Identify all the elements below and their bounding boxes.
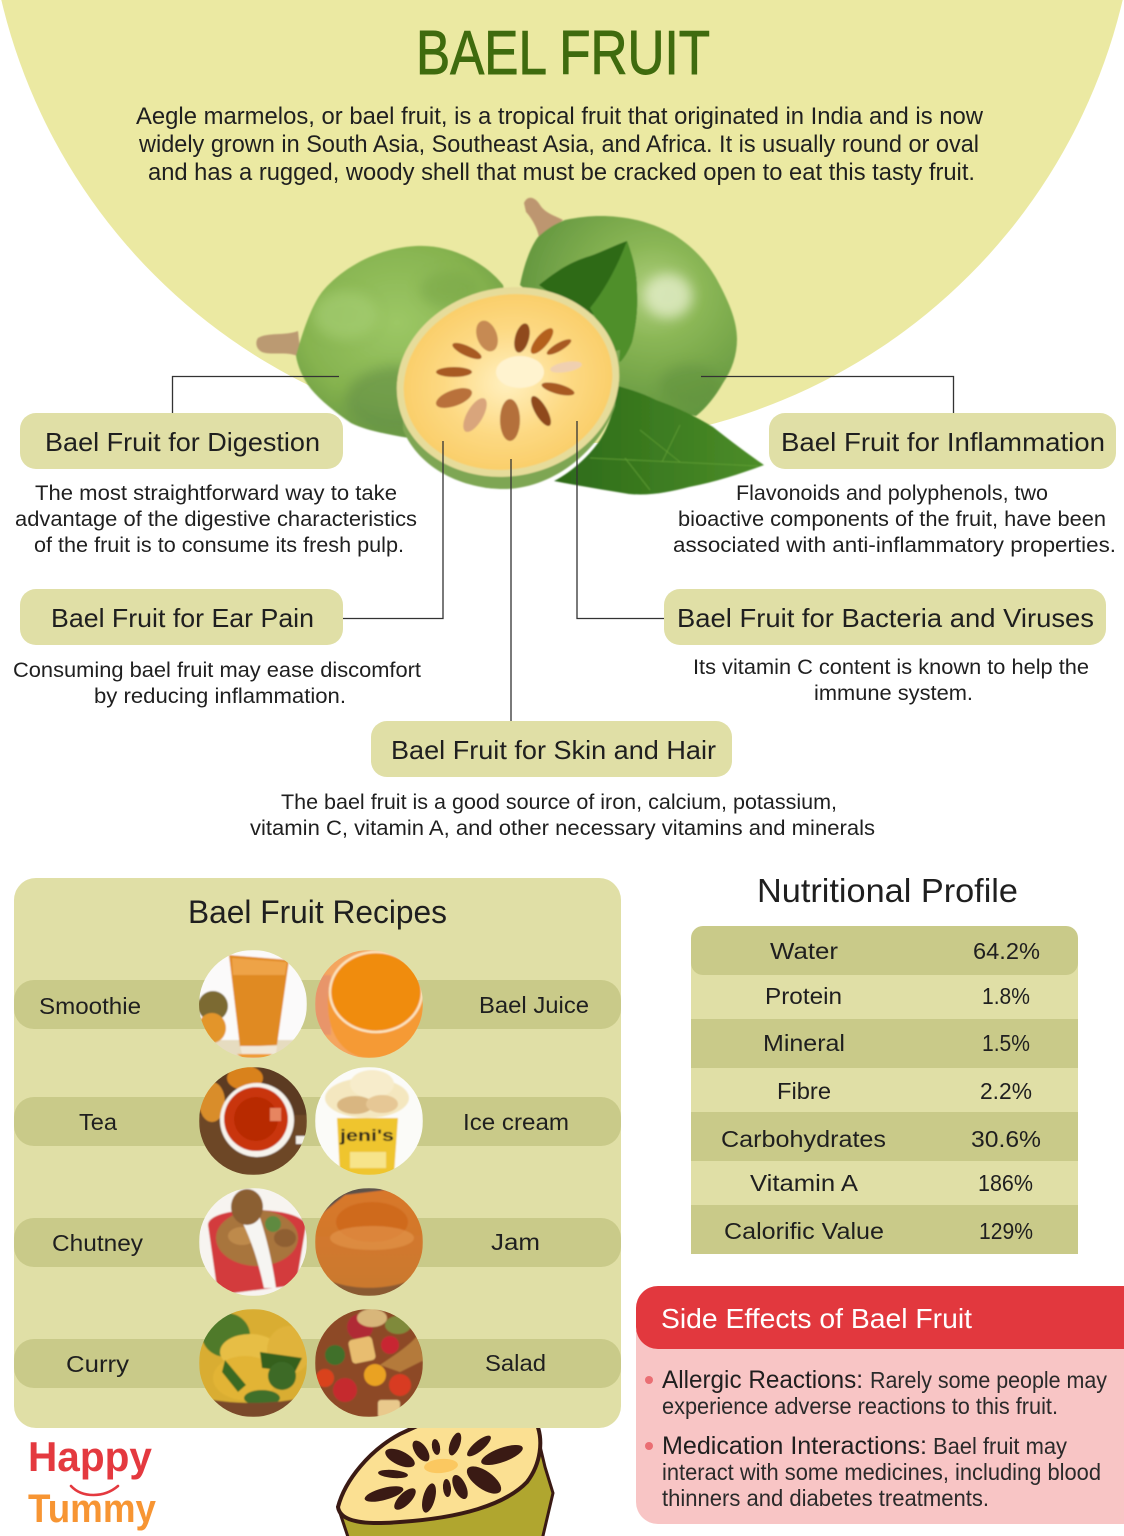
illustration: cut bael fruit sketch — [338, 1420, 553, 1536]
heading pill: bacteria and viruses: Bael Fruit for Bacteria and Viruses — [677, 603, 1094, 633]
text: inflammation: Flavonoids and polyphenols, two — [736, 482, 1048, 505]
row: water: 64.2% — [973, 938, 1040, 964]
text: digestion: The most straightforward way to take — [35, 482, 397, 505]
intro text: widely grown in South Asia, Southeast Asia, and Africa. It is usually round or oval — [138, 131, 979, 158]
panel: side effects — [636, 1286, 1124, 1524]
row: vitamin a: Vitamin A — [750, 1170, 859, 1196]
nutrition table — [691, 926, 1078, 1254]
recipe label: ice cream: Ice cream — [463, 1109, 569, 1135]
logo: happy tummy: Tummy — [28, 1487, 157, 1531]
recipe bars — [14, 980, 621, 1388]
panel: digestion — [15, 413, 417, 557]
text: skin and hair: vitamin C, vitamin A, and other necessary vitamins and minerals — [250, 817, 875, 840]
text: skin and hair: The bael fruit is a good source of iron, calcium, potassium, — [281, 791, 837, 814]
row: fibre: Fibre — [777, 1078, 831, 1104]
left whole fruit — [256, 246, 520, 438]
heading pill: ear pain — [20, 589, 343, 645]
side effect: medication interactions: thinners and diabetes treatments. — [662, 1485, 989, 1511]
nutritional profile heading: Nutritional Profile — [757, 872, 1018, 909]
row: protein: Protein — [765, 983, 842, 1009]
row: vitamin a — [750, 1170, 1033, 1196]
panel: inflammation — [673, 413, 1116, 557]
text: inflammation: bioactive components of the fruit, have been — [678, 508, 1106, 531]
image: tea — [199, 1066, 310, 1175]
image: smoothie — [198, 950, 307, 1060]
row: calorific value: Calorific Value — [724, 1218, 884, 1244]
row: water: Water — [770, 938, 838, 964]
image: chutney — [199, 1188, 307, 1296]
row: carbohydrates — [721, 1126, 1041, 1152]
heading pill: skin and hair: Bael Fruit for Skin and Hair — [391, 735, 716, 765]
logo: happy tummy — [28, 1433, 157, 1531]
heading pill: bacteria and viruses — [664, 589, 1106, 645]
text: ear pain: Consuming bael fruit may ease discomfort — [13, 659, 421, 682]
row: water — [770, 938, 1040, 964]
row: fibre — [777, 1078, 1032, 1104]
heading pill: ear pain: Bael Fruit for Ear Pain — [51, 603, 314, 633]
intro text: Aegle marmelos, or bael fruit, is a tropical fruit that originated in India and is now — [136, 103, 984, 130]
cut fruit half — [379, 267, 637, 497]
side effect: allergic reactions: experience adverse reactions to this fruit. — [662, 1393, 1058, 1419]
upper leaf — [539, 241, 637, 362]
intro text: and has a rugged, woody shell that must be cracked open to eat this tasty fruit. — [148, 159, 975, 186]
row: mineral: Mineral — [763, 1030, 845, 1056]
row: calorific value: 129% — [979, 1218, 1033, 1244]
image: bael juice — [315, 950, 423, 1058]
bael fruit illustration — [256, 198, 764, 497]
text: inflammation: associated with anti-inflammatory properties. — [673, 534, 1116, 557]
recipe label: salad: Salad — [485, 1350, 546, 1376]
row: protein: 1.8% — [982, 983, 1030, 1009]
lower leaf — [554, 386, 764, 495]
image: jam — [315, 1188, 423, 1296]
side effect: medication interactions: Medication Interactions: — [662, 1432, 927, 1460]
recipe label: curry: Curry — [66, 1351, 130, 1377]
logo: happy tummy: Happy — [28, 1433, 153, 1480]
text: bacteria and viruses: immune system. — [814, 682, 973, 705]
text: ear pain — [13, 659, 421, 708]
row: carbohydrates: Carbohydrates — [721, 1126, 886, 1152]
recipes heading: Bael Fruit Recipes — [188, 894, 447, 930]
heading pill: digestion — [20, 413, 343, 469]
connector lines — [172, 376, 954, 721]
recipe label: jam: Jam — [491, 1229, 540, 1255]
image: curry — [199, 1309, 311, 1417]
side effect: medication interactions — [645, 1432, 1101, 1511]
heading pill: inflammation: Bael Fruit for Inflammation — [781, 427, 1105, 457]
row: fibre: 2.2% — [980, 1078, 1032, 1104]
recipe label: bael juice: Bael Juice — [479, 992, 589, 1018]
side effect: allergic reactions: Allergic Reactions: — [662, 1366, 863, 1394]
row: carbohydrates: 30.6% — [971, 1126, 1041, 1152]
recipe label: smoothie: Smoothie — [39, 993, 141, 1019]
text: inflammation — [673, 482, 1116, 557]
row: mineral — [763, 1030, 1030, 1056]
text: ear pain: by reducing inflammation. — [94, 685, 346, 708]
intro text — [136, 103, 984, 186]
heading pill: inflammation — [769, 413, 1116, 469]
row: protein — [765, 983, 1030, 1009]
panel: ear pain — [13, 589, 421, 708]
side effect: medication interactions: interact with some medicines, including blood — [662, 1459, 1101, 1485]
seeds — [433, 318, 583, 441]
row: calorific value — [724, 1218, 1033, 1244]
text: digestion — [15, 482, 417, 557]
side effects header — [636, 1286, 1124, 1349]
title: BAEL FRUIT — [416, 19, 710, 88]
recipe label: tea: Tea — [79, 1109, 117, 1135]
recipe label: chutney: Chutney — [52, 1230, 144, 1256]
image: ice cream: jeni's — [339, 1126, 394, 1145]
image: ice cream — [315, 1067, 423, 1175]
text: bacteria and viruses — [693, 656, 1089, 705]
panel: skin and hair — [250, 721, 875, 840]
side effect: allergic reactions — [645, 1366, 1107, 1419]
panel: bacteria and viruses — [664, 589, 1106, 705]
panel: recipes — [14, 878, 621, 1428]
heading pill: skin and hair — [371, 721, 732, 777]
side effect: medication interactions: Bael fruit may — [933, 1433, 1067, 1459]
row: mineral: 1.5% — [982, 1030, 1030, 1056]
side effect: allergic reactions: Rarely some people may — [870, 1367, 1107, 1393]
text: digestion: of the fruit is to consume its fresh pulp. — [34, 534, 404, 557]
text: digestion: advantage of the digestive characteristics — [15, 508, 417, 531]
background semicircle — [0, 0, 1124, 444]
heading pill: digestion: Bael Fruit for Digestion — [45, 427, 320, 457]
text: skin and hair — [250, 791, 875, 840]
right whole fruit — [520, 198, 737, 416]
side effects header: Side Effects of Bael Fruit — [661, 1303, 972, 1334]
row: vitamin a: 186% — [978, 1170, 1033, 1196]
text: bacteria and viruses: Its vitamin C content is known to help the — [693, 656, 1089, 679]
image: salad — [315, 1309, 424, 1418]
